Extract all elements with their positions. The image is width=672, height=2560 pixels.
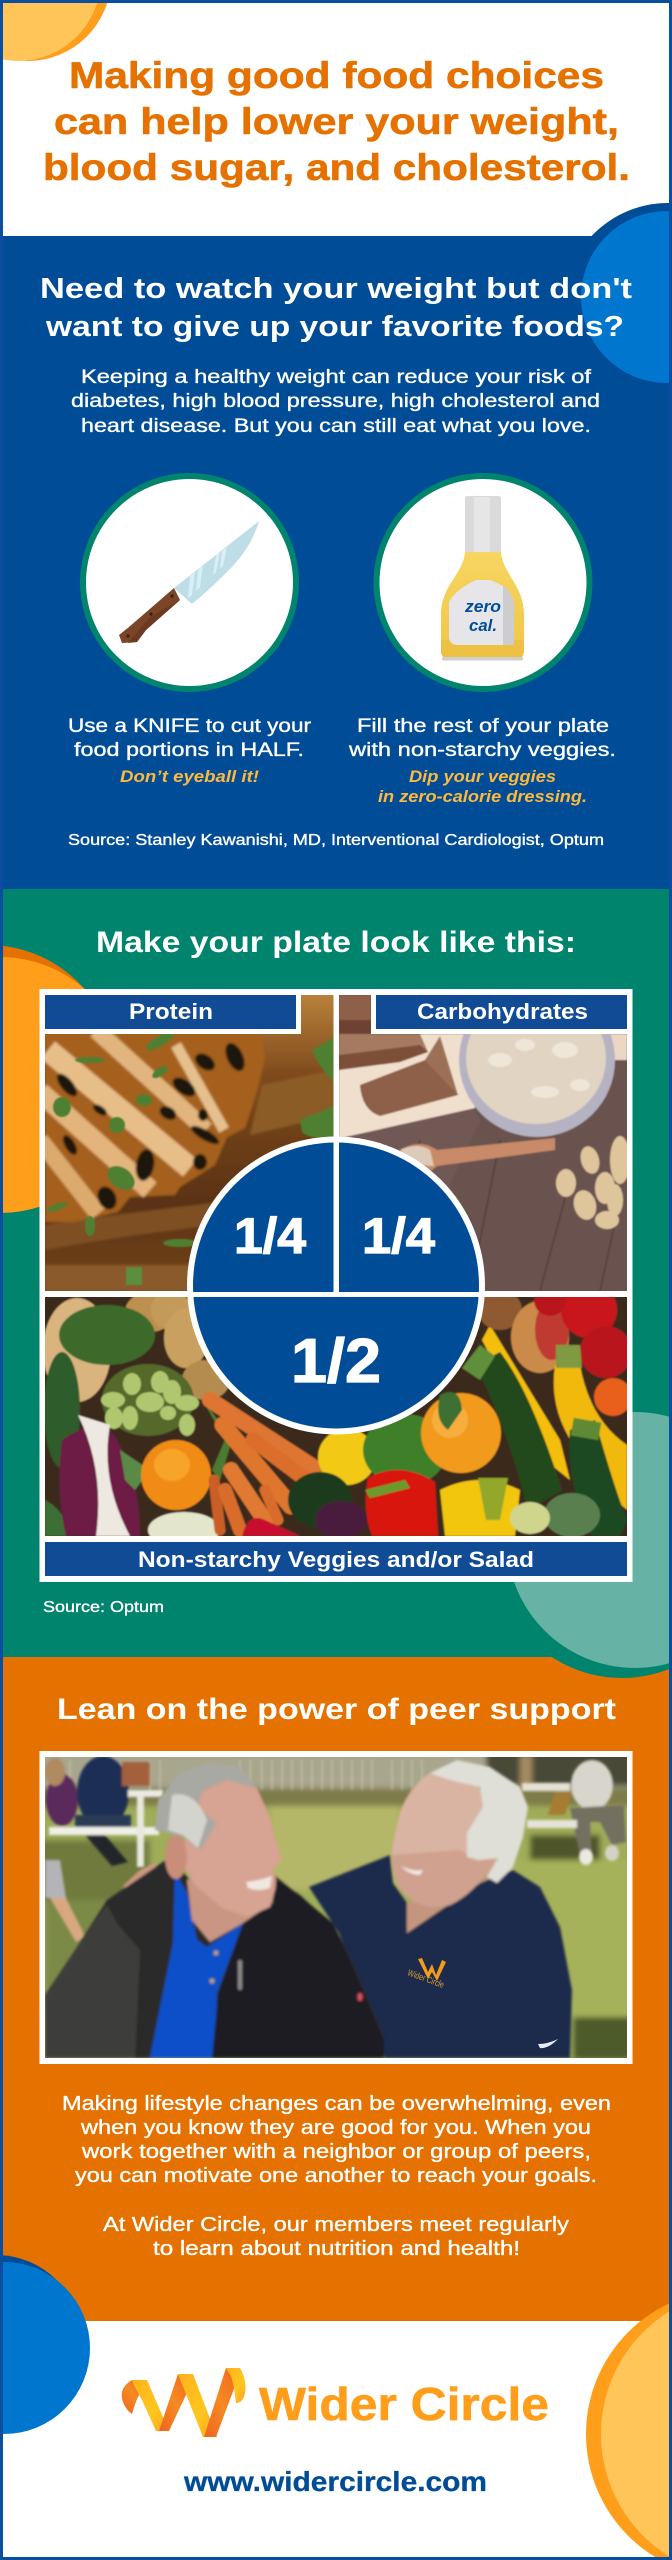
photo: vegetables	[45, 1297, 627, 1536]
title text	[43, 55, 630, 188]
section background blue	[0, 236, 672, 889]
intro paragraph	[71, 367, 600, 437]
title text: can help lower your weight,	[54, 101, 619, 142]
photo: carbohydrates	[335, 983, 631, 1296]
title text: Making good food choices	[69, 55, 604, 96]
photo: chicken protein	[40, 990, 340, 1296]
tip text: knife: Don’t eyeball it!	[120, 767, 259, 786]
body paragraph: peer support: work together with a neighbor or group of peers,	[81, 2141, 591, 2163]
plate circle: one quarter, one quarter, one half: 1/4	[234, 1208, 306, 1264]
decoration: top-right blue circle	[563, 203, 672, 413]
decoration: left orange circle	[0, 945, 128, 1213]
tip text: knife	[68, 716, 312, 786]
website url: www.widercircle.com	[183, 2466, 487, 2497]
heading: watch your weight	[40, 273, 632, 343]
decoration: right teal circle	[494, 1412, 672, 1678]
heading: watch your weight: Need to watch your weight but don't	[40, 273, 632, 305]
label: veggies and salad: Non-starchy Veggies and/or Salad	[138, 1547, 534, 1572]
logo text: Wider Circle: Wider Circle	[259, 2378, 549, 2430]
heading: make your plate: Make your plate look like this:	[96, 926, 576, 959]
body paragraph: peer support: to learn about nutrition and health!	[153, 2238, 520, 2260]
decoration: bottom-left blue circle	[0, 2255, 90, 2434]
body paragraph: peer support: At Wider Circle, our members meet regularly	[103, 2214, 569, 2236]
shirt logo: Wider Circle	[406, 1967, 445, 1990]
label: protein: Protein	[129, 999, 213, 1024]
decoration: bottom-right yellow circle	[586, 2290, 672, 2560]
icon: zero calorie dressing bottle	[376, 476, 590, 689]
tip text: veggies: in zero-calorie dressing.	[378, 787, 587, 806]
section background green	[0, 889, 672, 1657]
panel: peer support	[35, 1693, 637, 2260]
icon: knife in circle	[83, 476, 296, 689]
label: veggies and salad	[45, 1542, 627, 1576]
icon: zero calorie dressing bottle: zero	[464, 597, 501, 616]
tip text: veggies: with non-starchy veggies.	[348, 740, 616, 761]
icon: zero calorie dressing bottle: cal.	[469, 616, 497, 635]
panel: footer	[0, 2255, 672, 2560]
body paragraph: peer support: you can motivate one another to reach your goals.	[75, 2165, 597, 2187]
intro paragraph: Keeping a healthy weight can reduce your risk of	[81, 367, 592, 388]
heading: peer support: Lean on the power of peer support	[57, 1693, 616, 1726]
body paragraph: peer support	[62, 2093, 611, 2260]
tip text: veggies: Fill the rest of your plate	[357, 716, 609, 737]
source: cardiologist: Source: Stanley Kawanishi, MD, Interventional Cardiologist, Optum	[68, 832, 604, 849]
logo: Wider Circle ribbon	[122, 2368, 245, 2437]
title text: blood sugar, and cholesterol.	[43, 147, 630, 188]
plate frame	[40, 989, 632, 1582]
label: carbohydrates	[371, 990, 632, 1034]
section background orange	[0, 1657, 672, 2321]
label: protein	[40, 990, 301, 1034]
heading: watch your weight: want to give up your favorite foods?	[45, 311, 624, 343]
plate circle: one quarter, one quarter, one half: 1/2	[291, 1327, 381, 1396]
panel: weight advice	[0, 203, 672, 889]
intro paragraph: diabetes, high blood pressure, high cholesterol and	[71, 391, 600, 412]
body paragraph: peer support: Making lifestyle changes can be overwhelming, even	[62, 2093, 611, 2115]
tip text: knife: Use a KNIFE to cut your	[68, 716, 312, 737]
plate circle: one quarter, one quarter, one half	[187, 1136, 485, 1434]
intro paragraph: heart disease. But you can still eat what you love.	[81, 416, 591, 437]
tip text: veggies	[348, 716, 616, 806]
body paragraph: peer support: when you know they are good for you. When you	[80, 2117, 591, 2139]
tip text: veggies: Dip your veggies	[409, 767, 556, 786]
shirt logo	[408, 1958, 446, 1988]
panel: title	[0, 0, 630, 188]
label: carbohydrates: Carbohydrates	[417, 999, 588, 1024]
panel: plate	[0, 889, 672, 1678]
decoration: top-left orange circle	[0, 0, 111, 61]
tip text: knife: food portions in HALF.	[74, 740, 304, 761]
photo frame	[40, 1751, 632, 2064]
source: optum: Source: Optum	[43, 1599, 164, 1616]
plate circle: one quarter, one quarter, one half: 1/4	[362, 1208, 435, 1264]
photo: two friends	[35, 1750, 637, 2065]
